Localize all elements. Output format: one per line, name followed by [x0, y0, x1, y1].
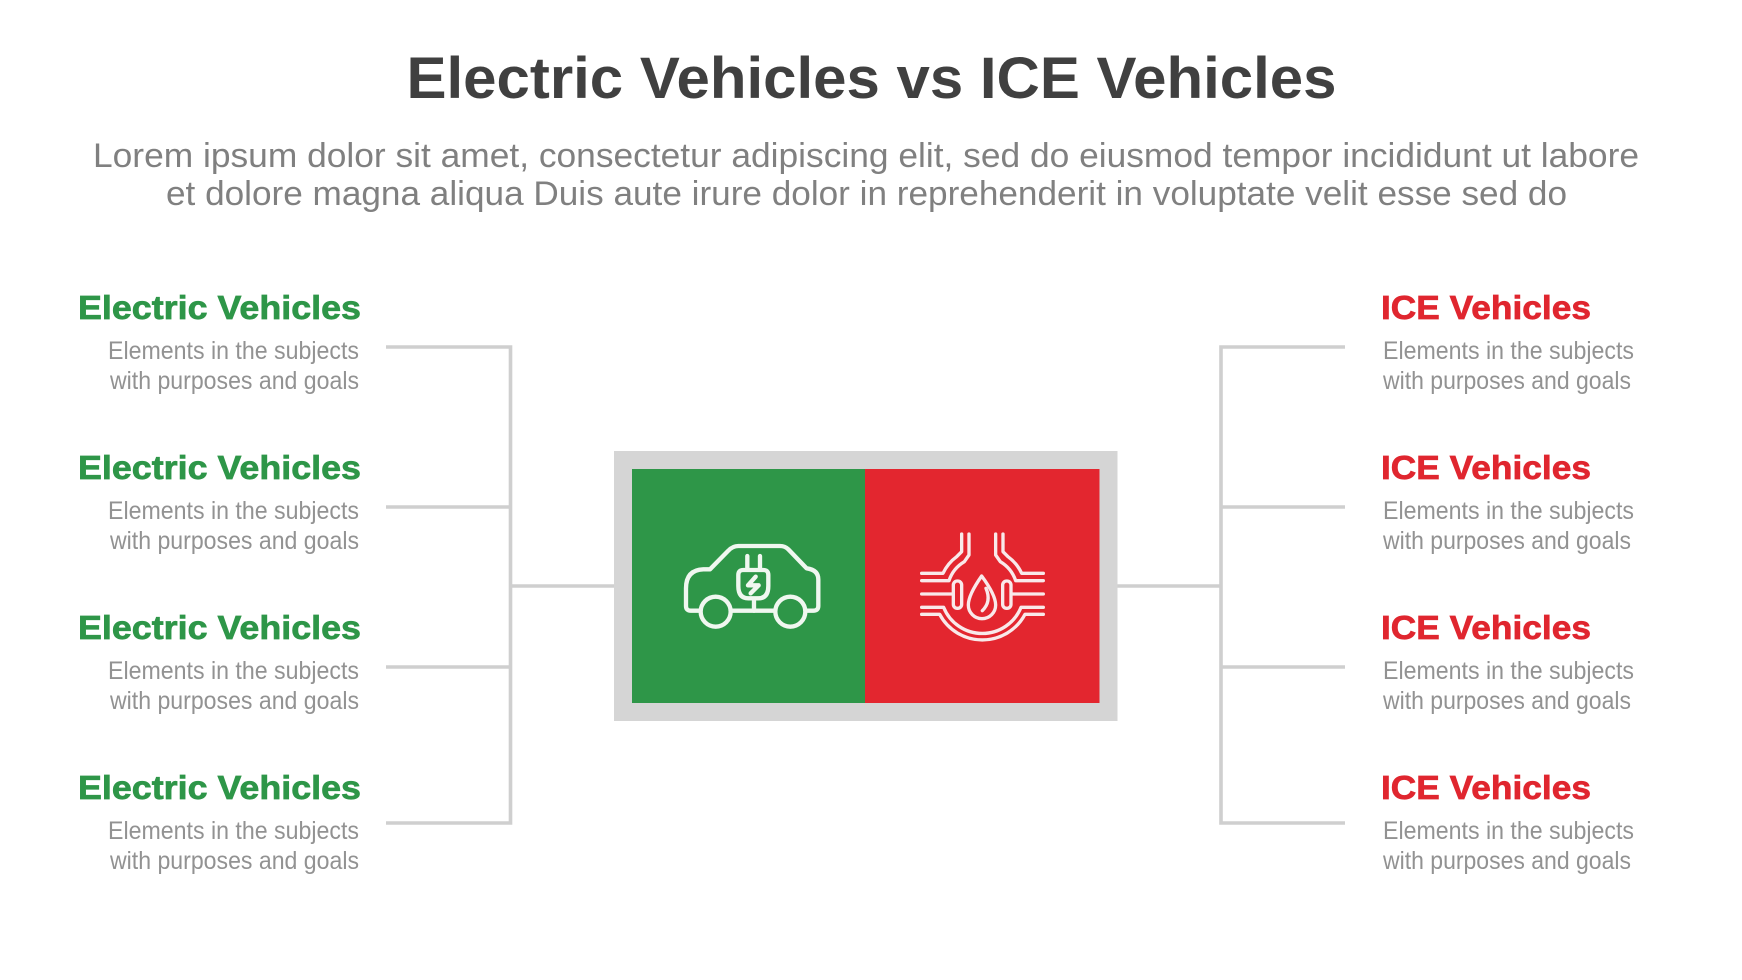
- item 1: Elements in the subjects: [1383, 337, 1634, 365]
- item 1: Elements in the subjects: [108, 337, 359, 365]
- item 3: with purposes and goals: [1382, 687, 1631, 715]
- right column: ICE vehicles: [1381, 289, 1634, 875]
- item 4: ICE Vehicles: [1381, 769, 1591, 806]
- panel frame: [614, 451, 1118, 721]
- item 4: [1381, 769, 1634, 875]
- item 3: [1381, 609, 1634, 715]
- item 3: [78, 609, 361, 715]
- item 1: Electric Vehicles: [78, 289, 361, 326]
- center panel: [614, 451, 1118, 721]
- item 1: [1381, 289, 1634, 395]
- item 2: with purposes and goals: [1382, 527, 1631, 555]
- item 4: with purposes and goals: [109, 847, 359, 875]
- item 4: [78, 769, 361, 875]
- item 4: Elements in the subjects: [108, 817, 359, 845]
- subtitle text: Lorem ipsum dolor sit amet, consectetur adipiscing elit, sed do eiusmod tempor incididunt ut labore: [93, 137, 1639, 175]
- item 2: Electric Vehicles: [78, 449, 361, 486]
- subtitle text: et dolore magna aliqua Duis aute irure dolor in reprehenderit in voluptate velit esse sed do: [166, 175, 1567, 213]
- item 4: with purposes and goals: [1382, 847, 1631, 875]
- item 2: with purposes and goals: [109, 527, 359, 555]
- icon: oil pipeline drop: [922, 534, 1043, 640]
- icon: electric car: [686, 546, 818, 627]
- item 4: Electric Vehicles: [78, 769, 361, 806]
- item 4: Elements in the subjects: [1383, 817, 1634, 845]
- item 2: Elements in the subjects: [108, 497, 359, 525]
- red half: [865, 469, 1100, 703]
- left connector lines: [386, 347, 614, 823]
- item 2: [78, 449, 361, 555]
- item 3: Electric Vehicles: [78, 609, 361, 646]
- item 1: [78, 289, 361, 395]
- item 1: with purposes and goals: [1382, 367, 1631, 395]
- item 2: ICE Vehicles: [1381, 449, 1591, 486]
- item 3: Elements in the subjects: [108, 657, 359, 685]
- title: Electric Vehicles vs ICE Vehicles: [406, 46, 1336, 111]
- item 2: [1381, 449, 1634, 555]
- right connector lines: [1117, 347, 1345, 823]
- item 1: with purposes and goals: [109, 367, 359, 395]
- green half: [632, 469, 865, 703]
- item 3: ICE Vehicles: [1381, 609, 1591, 646]
- item 2: Elements in the subjects: [1383, 497, 1634, 525]
- item 3: Elements in the subjects: [1383, 657, 1634, 685]
- subtitle text: [93, 137, 1639, 213]
- item 3: with purposes and goals: [109, 687, 359, 715]
- item 1: ICE Vehicles: [1381, 289, 1591, 326]
- left column: electric vehicles: [78, 289, 361, 875]
